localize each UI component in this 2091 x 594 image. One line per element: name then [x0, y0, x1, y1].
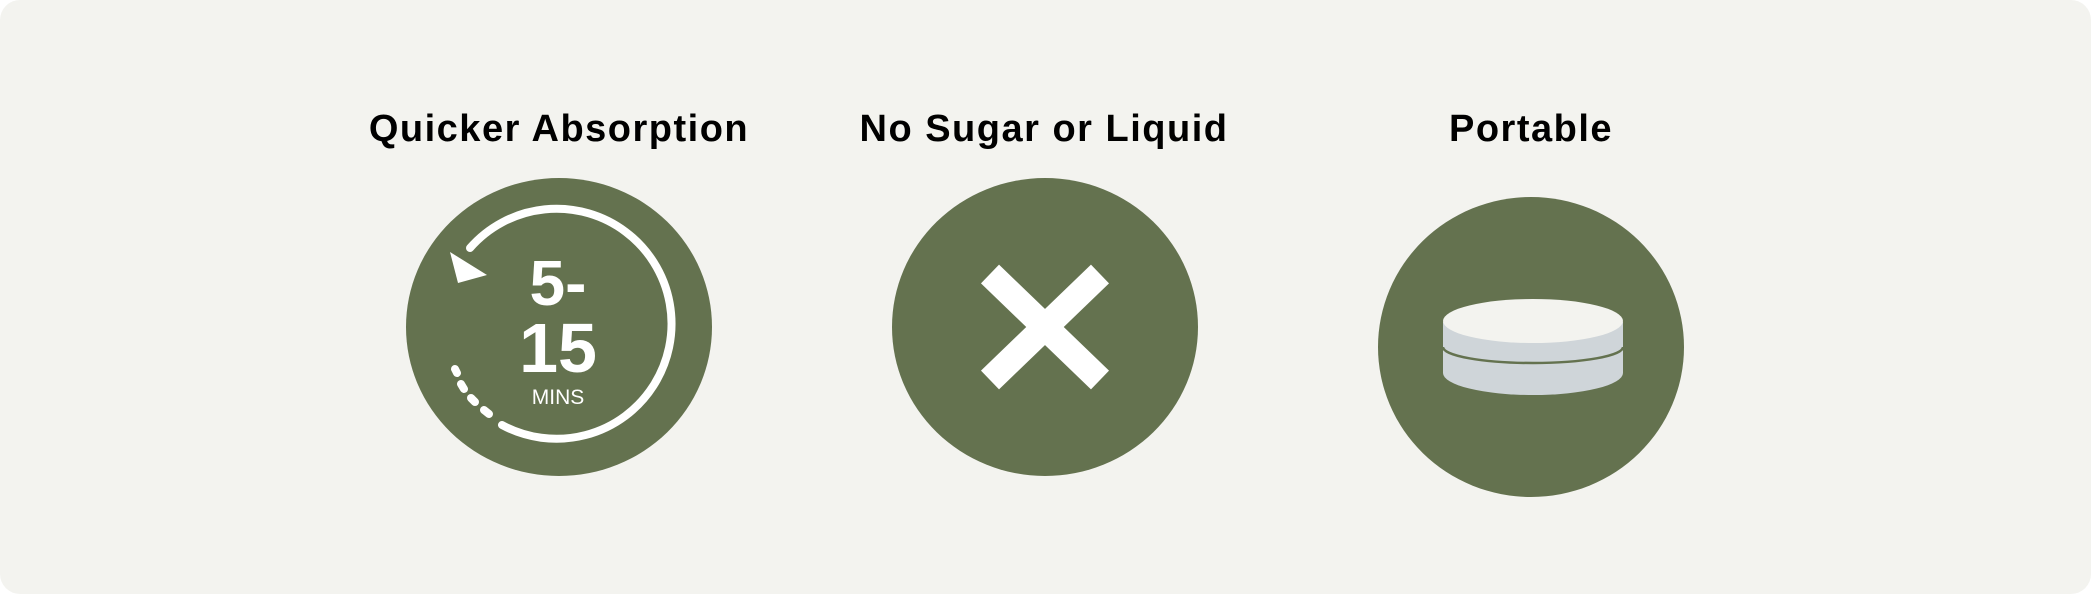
title: Portable: Portable — [1449, 108, 1613, 150]
icon: clock 5-15 mins: MINS — [532, 386, 584, 409]
title: No Sugar or Liquid: No Sugar or Liquid — [860, 108, 1228, 150]
icon: clock 5-15 mins: 5- — [530, 247, 586, 319]
icon: X no sugar — [892, 178, 1198, 476]
title: Quicker Absorption: Quicker Absorption — [369, 108, 749, 150]
icon: portable pouch — [1378, 197, 1684, 497]
icon: clock 5-15 mins: 15 — [519, 309, 597, 387]
icon: clock 5-15 mins — [406, 178, 712, 476]
